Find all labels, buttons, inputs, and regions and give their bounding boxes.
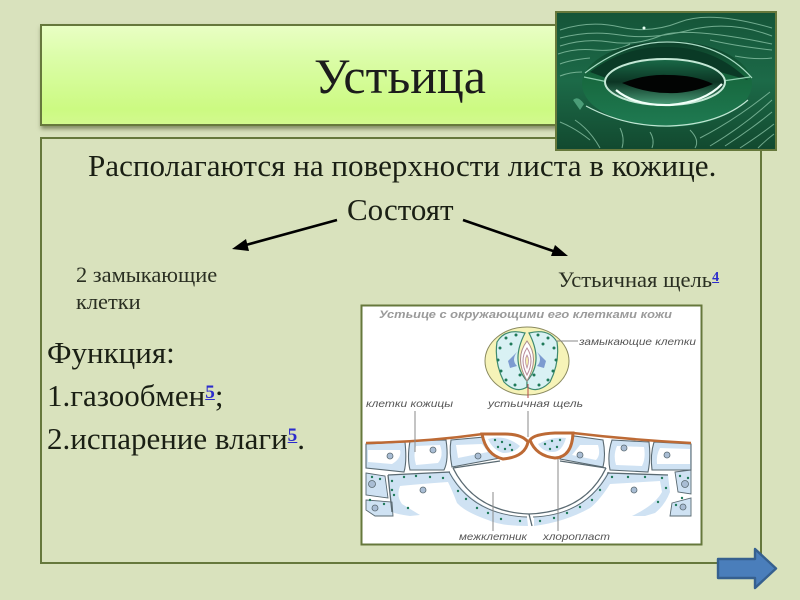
- stoma top view: [485, 327, 569, 395]
- diagram labels: замыкающие клетки: [578, 336, 696, 348]
- guard cells in section: [482, 434, 528, 459]
- diagram labels: [366, 336, 696, 543]
- pointer lines: [415, 341, 578, 531]
- photo: stoma micrograph: [555, 11, 777, 151]
- heading: consists of: Состоят: [347, 192, 454, 227]
- title panel: [40, 24, 559, 126]
- intercellular space outline: [388, 461, 668, 526]
- diagram labels: устьичная щель: [487, 398, 583, 410]
- title: Устьица: [314, 48, 486, 104]
- upper epidermis cells: [366, 436, 691, 472]
- intro text: Располагаются на поверхности листа в кожице.: [88, 148, 716, 183]
- label: guard cells: 2 замыкающие: [76, 262, 217, 287]
- arrow: to stomatal slit: [462, 218, 568, 256]
- diagram labels: межклетник: [459, 531, 528, 543]
- mesophyll bands: [388, 472, 528, 526]
- upper cell interiors: [368, 444, 690, 466]
- cell nuclei: [368, 445, 688, 511]
- label: guard cells: [76, 262, 217, 314]
- diagram title: Устьице с окружающими его клетками кожи: [379, 309, 672, 321]
- arrow: to guard cells: [232, 218, 338, 251]
- label: guard cells: клетки: [76, 289, 141, 314]
- function list: [47, 335, 305, 456]
- diagram labels: клетки кожицы: [366, 398, 453, 410]
- diagram labels: хлоропласт: [542, 531, 610, 543]
- function list: 1.газообмен5;: [47, 378, 223, 413]
- navigation arrow: [716, 548, 778, 590]
- leaf cross-section: [366, 433, 691, 526]
- function list: 2.испарение влаги5.: [47, 421, 305, 456]
- chloroplast dots: [369, 475, 689, 522]
- diagram: stoma with surrounding skin cells: [360, 304, 702, 546]
- content panel: [40, 137, 762, 564]
- function list: Функция:: [47, 335, 175, 370]
- cuticle: [366, 433, 691, 443]
- label: stomatal slit: Устьичная щель4: [558, 267, 719, 292]
